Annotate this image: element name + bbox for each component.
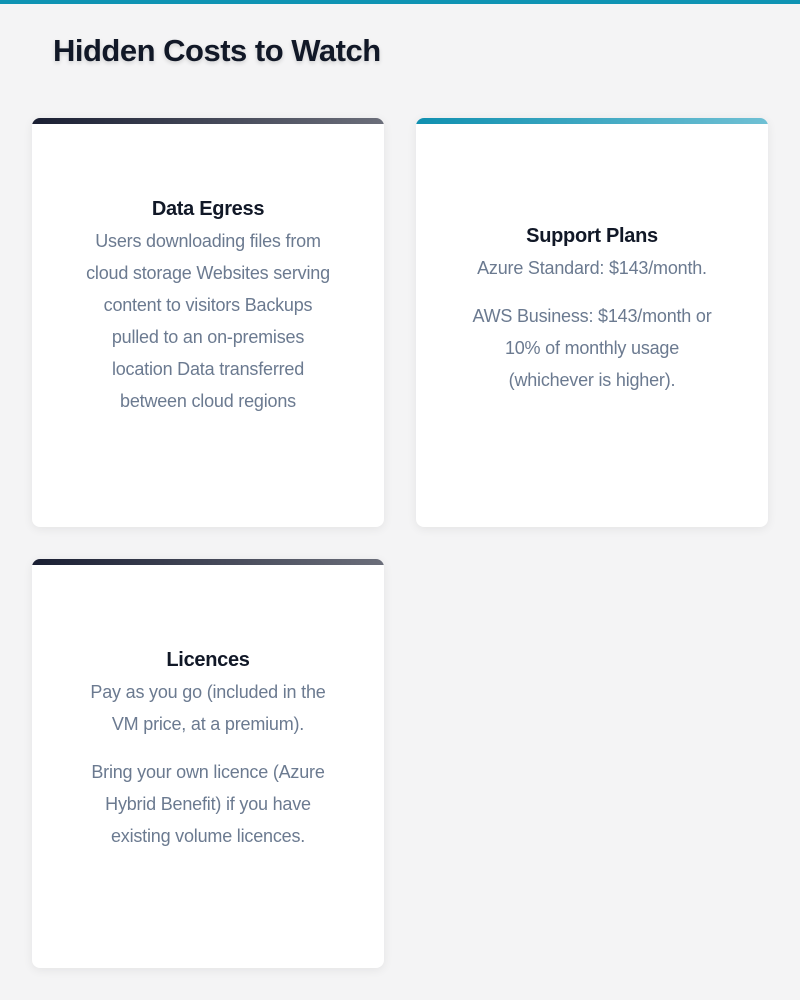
text: data egress: cloud storage Websites serving <box>86 263 330 283</box>
text: support plans: AWS Business: $143/month or <box>472 306 712 326</box>
title: Hidden Costs to Watch <box>53 33 381 68</box>
heading: support plans: Support Plans <box>526 225 658 247</box>
text: licences <box>90 682 326 846</box>
text: data egress: content to visitors Backups <box>104 295 312 315</box>
text: licences: Bring your own licence (Azure <box>91 762 325 782</box>
text: data egress <box>86 231 330 411</box>
text: data egress: pulled to an on-premises <box>112 327 304 347</box>
panel: data egress <box>32 118 384 527</box>
heading: licences: Licences <box>166 649 250 671</box>
text: support plans: 10% of monthly usage <box>505 338 679 358</box>
heading: data egress: Data Egress <box>152 198 264 220</box>
text: licences: Pay as you go (included in the <box>90 682 326 702</box>
text: data egress: between cloud regions <box>120 391 296 411</box>
text: data egress: Users downloading files from <box>95 231 321 251</box>
text: support plans: Azure Standard: $143/month. <box>477 258 707 278</box>
text: support plans: (whichever is higher). <box>509 370 675 390</box>
text: data egress: location Data transferred <box>112 359 304 379</box>
text: support plans <box>472 258 712 390</box>
panel: support plans <box>416 118 768 527</box>
text: licences: Hybrid Benefit) if you have <box>105 794 311 814</box>
text: licences: existing volume licences. <box>111 826 305 846</box>
text: licences: VM price, at a premium). <box>112 714 304 734</box>
panel: licences <box>32 559 384 968</box>
